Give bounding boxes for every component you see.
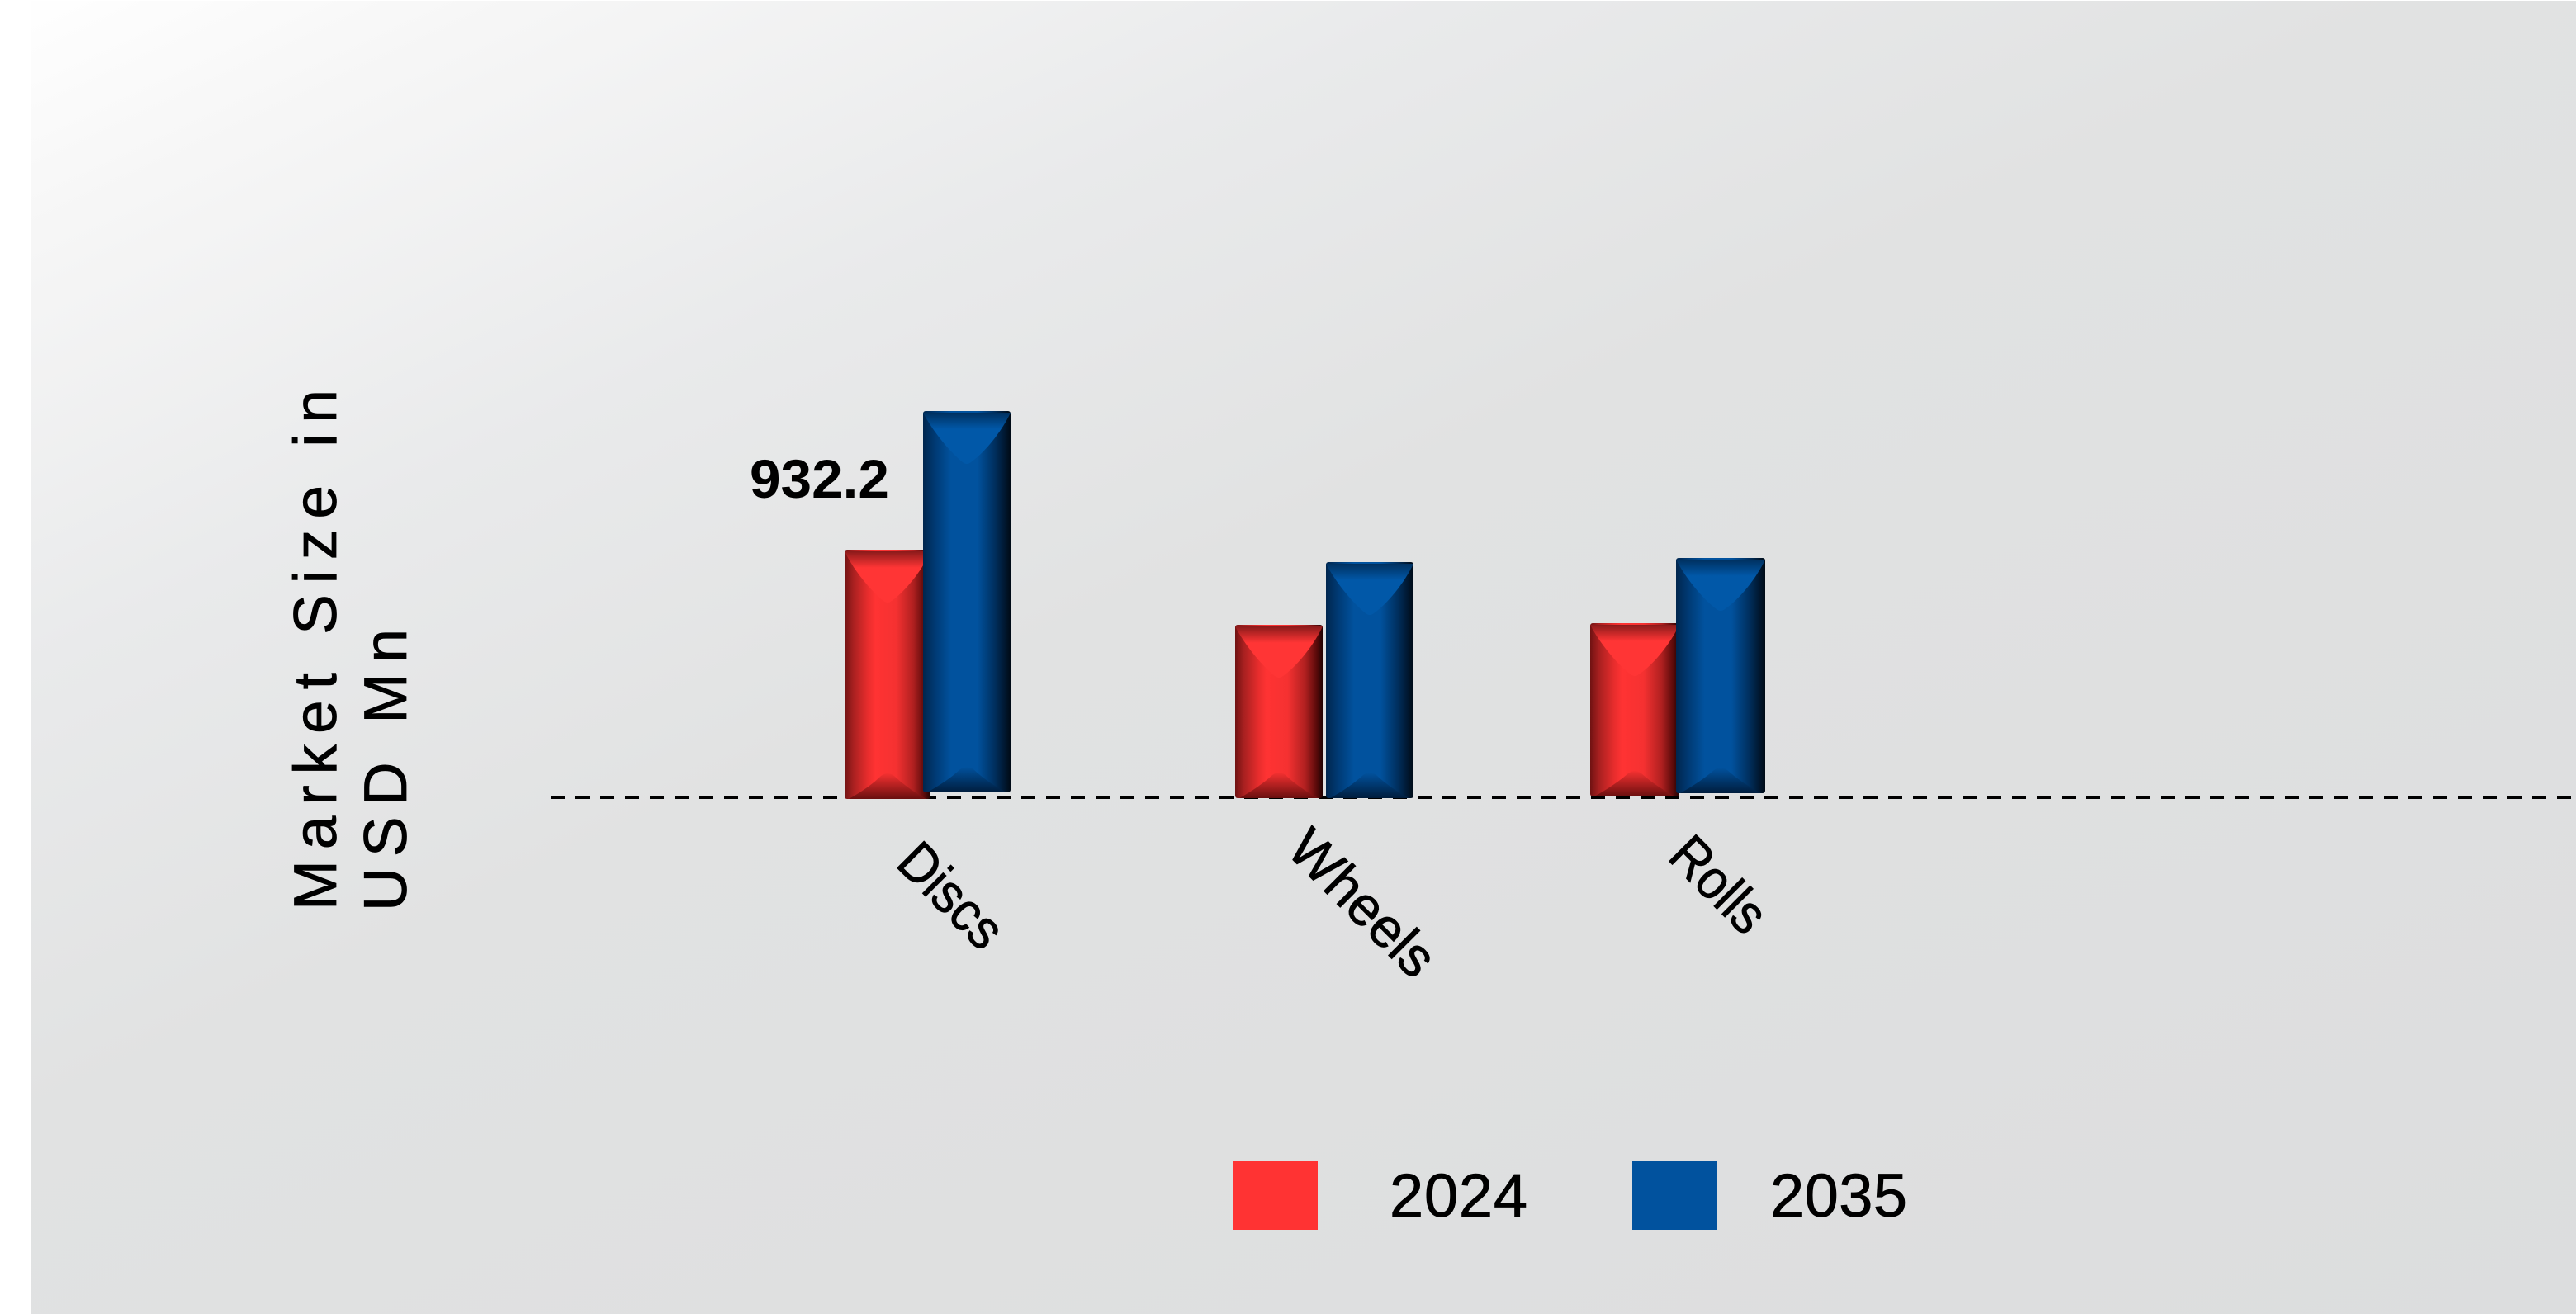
legend swatch: 2035: [1632, 1161, 1717, 1230]
group: Wheels: [1235, 562, 1413, 798]
y-axis title: [282, 390, 419, 911]
bar: Rolls 2035: [1676, 558, 1765, 793]
bar: Discs 2024: [845, 550, 930, 799]
category label: Discs: Discs: [885, 830, 1016, 962]
bar: Discs 2035: [923, 411, 1011, 792]
x-axis dashed baseline: [551, 796, 2576, 799]
legend text: 2035: 2035: [1770, 1161, 1907, 1230]
data label: 932.2: 932.2: [750, 448, 889, 509]
bar: Wheels 2035: [1326, 562, 1413, 798]
group: Discs: [845, 411, 1011, 799]
legend text: 2024: 2024: [1390, 1161, 1527, 1230]
category label: Wheels: Wheels: [1276, 817, 1449, 990]
y-axis title: Market Size in: [282, 390, 349, 910]
legend swatch: 2024: [1233, 1161, 1318, 1230]
group: Rolls: [1590, 558, 1765, 796]
bar: Wheels 2024: [1235, 625, 1323, 798]
bar: Rolls 2024: [1590, 623, 1679, 796]
category label: Rolls: Rolls: [1657, 824, 1780, 946]
legend: [1233, 1161, 1907, 1230]
y-axis title: USD Mn: [353, 629, 419, 911]
bar chart: [845, 411, 1765, 799]
